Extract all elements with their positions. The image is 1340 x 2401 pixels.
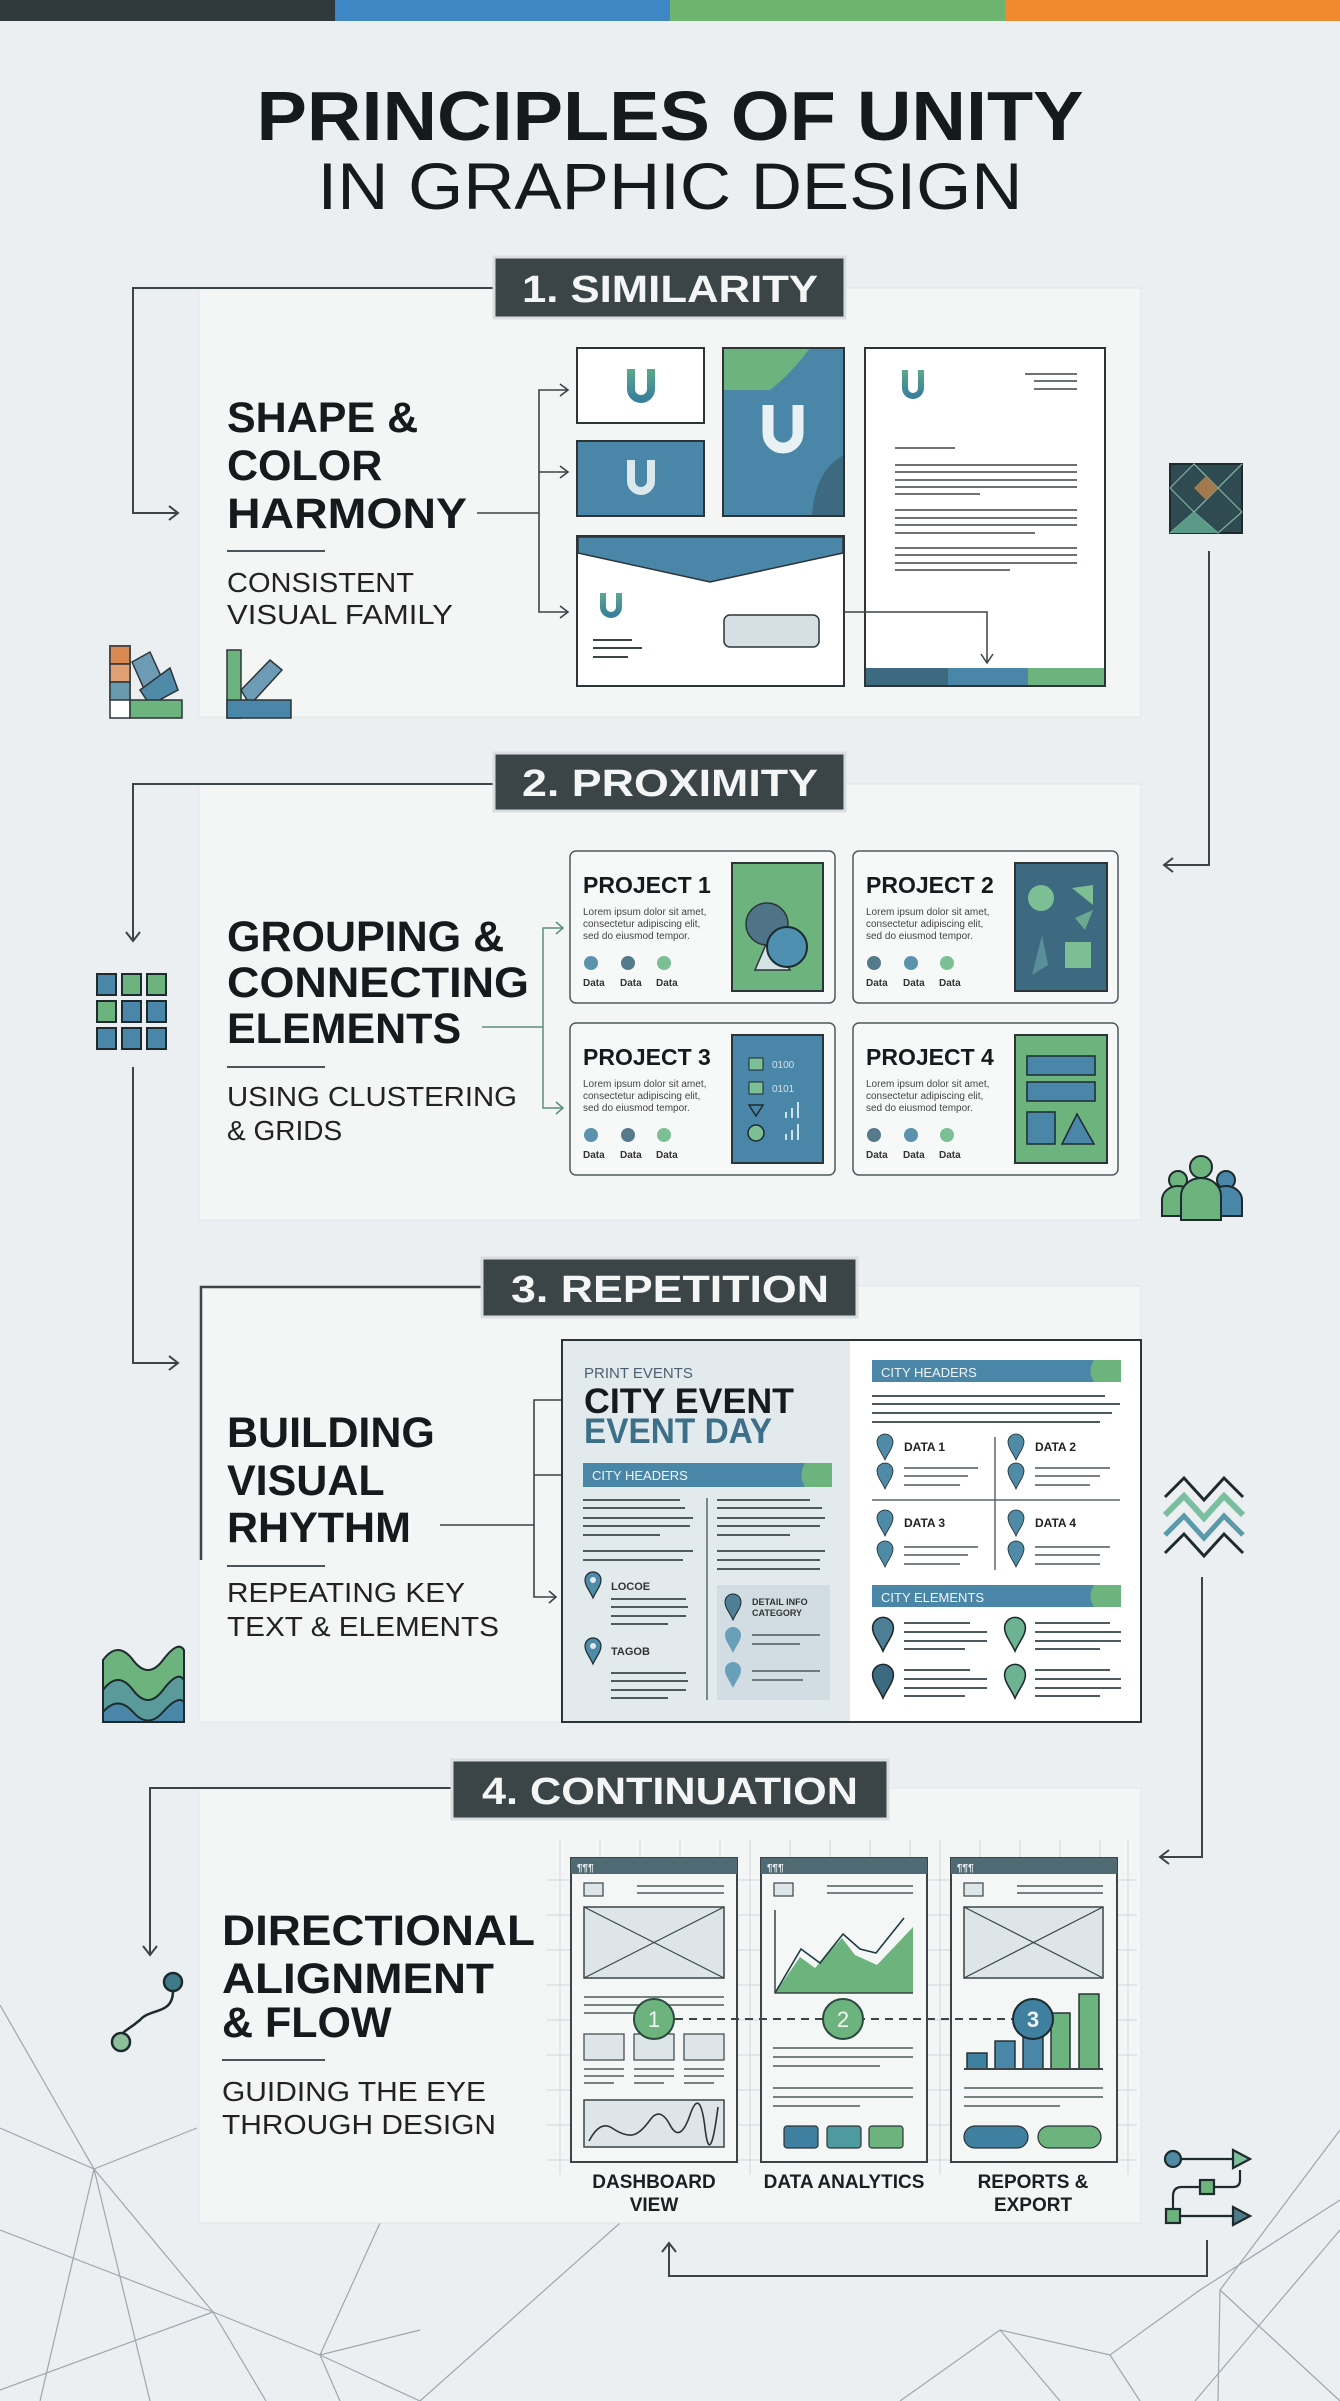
heading: grouping & connecting elements: GROUPING & <box>227 913 504 961</box>
panel: repetition <box>199 1286 1141 1722</box>
title <box>256 77 1084 223</box>
label: 1. similarity: 1. SIMILARITY <box>522 269 818 311</box>
subtext: using clustering & grids <box>227 1081 517 1146</box>
subtext: using clustering & grids: USING CLUSTERING <box>227 1081 517 1112</box>
wireframe labels: EXPORT <box>994 2195 1072 2216</box>
heading: grouping & connecting elements <box>227 913 529 1053</box>
wireframe: data analytics <box>761 1858 927 2162</box>
heading: directional alignment & flow: DIRECTIONAL <box>222 1907 535 1955</box>
connector: rhythm to mockup <box>440 1400 570 1603</box>
card: project 2: PROJECT 2 <box>866 872 994 898</box>
wireframe: dashboard view <box>571 1858 737 2162</box>
panel: similarity <box>133 288 1141 717</box>
label: 4. continuation <box>452 1760 888 1819</box>
label: 3. repetition: 3. REPETITION <box>511 1269 829 1311</box>
heading: directional alignment & flow: & FLOW <box>222 1999 392 2047</box>
connector: grouping to cards <box>482 922 563 1114</box>
label: 2. proximity <box>494 753 845 811</box>
subtext: consistent visual family <box>227 567 453 630</box>
card: project 4: Data <box>866 1150 888 1161</box>
subtext: consistent visual family: VISUAL FAMILY <box>227 599 453 630</box>
connector: harmony to mockups <box>477 384 568 618</box>
wireframe grid backdrop <box>547 1840 1137 2175</box>
card: project 3: Data <box>583 1150 605 1161</box>
icon: grid <box>97 974 166 1049</box>
panel: proximity <box>126 784 1141 1220</box>
card: project 4: Data <box>903 1150 925 1161</box>
icon: waves <box>103 1647 184 1722</box>
label: 4. continuation: 4. CONTINUATION <box>482 1771 858 1813</box>
heading: grouping & connecting elements: CONNECTING <box>227 959 529 1007</box>
mockup: event poster: EVENT DAY <box>584 1412 772 1451</box>
card: project 4: sed do eiusmod tempor. <box>866 1103 973 1114</box>
card: project 1 <box>570 851 835 1003</box>
flow: numbered step circles: 3 <box>1027 2007 1039 2032</box>
mockup: event poster: CATEGORY <box>752 1608 802 1618</box>
mockup: event poster: DETAIL INFO <box>752 1597 808 1607</box>
card: project 2: consectetur adipiscing elit, <box>866 919 983 930</box>
title: IN GRAPHIC DESIGN <box>318 149 1022 223</box>
icon: flow diagram <box>1165 2150 1250 2225</box>
wireframe labels: REPORTS & <box>978 2172 1089 2193</box>
heading: grouping & connecting elements: ELEMENTS <box>227 1005 461 1053</box>
mockup: envelope <box>577 536 844 686</box>
connector: section 1 to 2 right <box>1164 551 1209 872</box>
label: 2. proximity: 2. PROXIMITY <box>522 763 818 805</box>
subtext: using clustering & grids: & GRIDS <box>227 1115 342 1146</box>
connector: section 2 to 3 left <box>133 1067 178 1370</box>
heading: directional alignment & flow: ALIGNMENT <box>222 1955 494 2003</box>
mockup: event poster: CITY ELEMENTS <box>881 1590 984 1605</box>
card: project 2: Data <box>866 978 888 989</box>
card: project 2 <box>853 851 1118 1003</box>
card: project 1: sed do eiusmod tempor. <box>583 931 690 942</box>
mockup: event poster: TAGOB <box>611 1646 650 1658</box>
mockup: event poster: CITY HEADERS <box>592 1468 688 1483</box>
icon: path nodes <box>112 1973 182 2051</box>
card: project 1: consectetur adipiscing elit, <box>583 919 700 930</box>
connector: bottom return arrow <box>662 2240 1207 2276</box>
subtext: guiding the eye through design: THROUGH DESIGN <box>222 2109 496 2140</box>
wireframe: reports & export <box>951 1858 1117 2162</box>
card: project 4: Lorem ipsum dolor sit amet, <box>866 1079 989 1090</box>
wireframe labels: DATA ANALYTICS <box>764 2172 924 2193</box>
icon: color swatches <box>110 646 291 718</box>
card: project 3: 0100 <box>772 1060 795 1071</box>
mockup: big blue panel <box>723 348 844 516</box>
card: project 3: Data <box>620 1150 642 1161</box>
title: PRINCIPLES OF UNITY <box>256 77 1084 155</box>
mockup: event poster: CITY HEADERS <box>881 1365 977 1380</box>
card: project 4: consectetur adipiscing elit, <box>866 1091 983 1102</box>
card: project 1: Data <box>620 978 642 989</box>
card: project 1: Data <box>583 978 605 989</box>
mockup: event poster: CITY EVENT <box>584 1382 794 1421</box>
subtext: repeating key text & elements: REPEATING KEY <box>227 1577 465 1608</box>
wireframe labels: VIEW <box>630 2195 678 2216</box>
icon: pattern tile <box>1170 464 1242 533</box>
card: project 3: Data <box>656 1150 678 1161</box>
card: project 4: Data <box>939 1150 961 1161</box>
heading: shape & color harmony: HARMONY <box>227 490 467 538</box>
heading: building visual rhythm: VISUAL <box>227 1457 385 1505</box>
flow: numbered step circles: 2 <box>837 2007 849 2032</box>
icon: people <box>1162 1156 1242 1220</box>
mockup: event poster: DATA 2 <box>1035 1440 1076 1454</box>
mockup: event poster <box>562 1340 1141 1722</box>
card: project 3 <box>570 1023 835 1175</box>
wireframe labels: DASHBOARD <box>592 2172 716 2193</box>
label: 3. repetition <box>482 1258 857 1317</box>
flow: numbered step circles <box>634 1999 1053 2039</box>
mockup: event poster: LOCOE <box>611 1581 650 1593</box>
background geometric lines <box>0 2005 1340 2401</box>
mockup: event poster: PRINT EVENTS <box>584 1365 693 1382</box>
card: project 3: PROJECT 3 <box>583 1044 711 1070</box>
card: project 1: Data <box>656 978 678 989</box>
card: project 2: Lorem ipsum dolor sit amet, <box>866 907 989 918</box>
label: 1. similarity <box>494 257 845 318</box>
heading: building visual rhythm <box>227 1409 435 1552</box>
subtext: repeating key text & elements: TEXT & ELEMENTS <box>227 1611 499 1642</box>
subtext: guiding the eye through design: GUIDING THE EYE <box>222 2076 486 2107</box>
heading: building visual rhythm: RHYTHM <box>227 1504 411 1552</box>
card: project 1: PROJECT 1 <box>583 872 711 898</box>
subtext: guiding the eye through design <box>222 2076 496 2140</box>
mockup: event poster: DATA 3 <box>904 1516 945 1530</box>
card: project 3: consectetur adipiscing elit, <box>583 1091 700 1102</box>
connector: section 4 left <box>143 1788 452 1955</box>
mockup: white card <box>577 348 704 423</box>
card: project 1: Lorem ipsum dolor sit amet, <box>583 907 706 918</box>
wireframe labels <box>592 2172 1089 2216</box>
flow: numbered step circles: 1 <box>648 2007 660 2032</box>
connector: section 1 left <box>133 288 494 520</box>
card: project 2: Data <box>939 978 961 989</box>
card: project 3: 0101 <box>772 1084 795 1095</box>
card: project 4 <box>853 1023 1118 1175</box>
heading: building visual rhythm: BUILDING <box>227 1409 435 1457</box>
mockup: blue card <box>577 441 704 516</box>
heading: shape & color harmony: SHAPE & <box>227 394 418 442</box>
heading: shape & color harmony <box>227 394 467 538</box>
wireframe: reports & export: ¶¶¶ <box>957 1863 974 1874</box>
icon: zigzag <box>1165 1478 1243 1556</box>
heading: shape & color harmony: COLOR <box>227 442 382 490</box>
wireframe: data analytics: ¶¶¶ <box>767 1863 784 1874</box>
card: project 3: sed do eiusmod tempor. <box>583 1103 690 1114</box>
wireframe: dashboard view: ¶¶¶ <box>577 1863 594 1874</box>
card: project 2: Data <box>903 978 925 989</box>
subtext: repeating key text & elements <box>227 1577 499 1642</box>
mockup: event poster: DATA 1 <box>904 1440 945 1454</box>
panel: continuation <box>143 1788 1141 2223</box>
connector: section 3 to 4 right <box>1160 1577 1202 1864</box>
heading: directional alignment & flow <box>222 1907 535 2047</box>
mockup: event poster: DATA 4 <box>1035 1516 1076 1530</box>
mockup: letterhead <box>865 348 1105 686</box>
arrow: envelope to letter <box>844 612 993 663</box>
connector: section 2 left <box>126 784 494 941</box>
subtext: consistent visual family: CONSISTENT <box>227 567 414 598</box>
top color bar <box>0 0 1340 21</box>
card: project 4: PROJECT 4 <box>866 1044 994 1070</box>
card: project 2: sed do eiusmod tempor. <box>866 931 973 942</box>
card: project 3: Lorem ipsum dolor sit amet, <box>583 1079 706 1090</box>
